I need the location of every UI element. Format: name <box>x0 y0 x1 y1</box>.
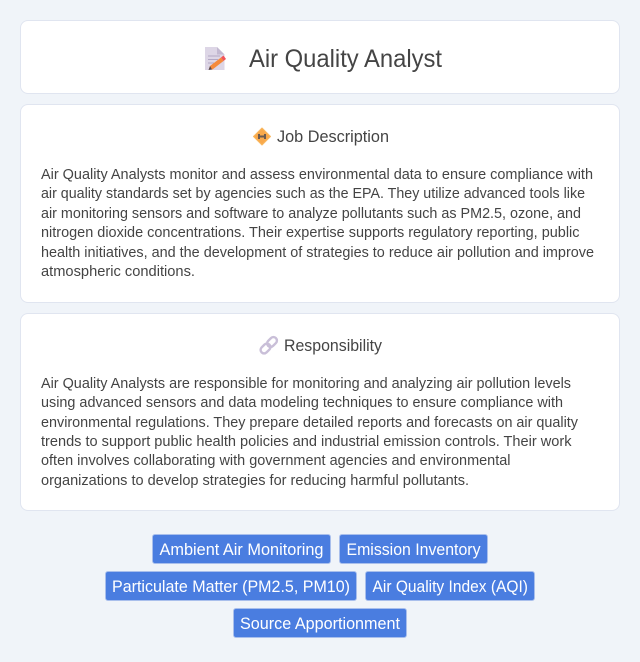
tag: emission inventory: Emission Inventory <box>346 541 481 559</box>
text block: responsibility: trends to support public health policies and industrial emission controls. Their work <box>41 434 572 450</box>
tag: particulate matter: Particulate Matter (PM2.5, PM10) <box>112 578 350 596</box>
text block: responsibility <box>41 376 579 489</box>
text block: job description: health initiatives, and the development of strategies to reduce air pollution and improve <box>41 245 594 261</box>
tag: air quality index <box>365 571 535 601</box>
text block: job description: atmospheric conditions. <box>41 264 195 280</box>
tag: emission inventory <box>339 534 488 564</box>
text block: job description: nitrogen dioxide concentrations. Their expertise supports regulatory reporting, public <box>41 225 580 241</box>
text block: responsibility: using advanced sensors and data modeling techniques to ensure compliance with <box>41 395 563 411</box>
tag: source apportionment <box>233 608 407 638</box>
tag: source apportionment: Source Apportionment <box>240 615 400 633</box>
text block: responsibility: Air Quality Analysts are responsible for monitoring and analyzing air pollution levels <box>41 376 571 392</box>
tag: ambient air monitoring: Ambient Air Monitoring <box>160 541 324 559</box>
tag: ambient air monitoring <box>152 534 331 564</box>
panel: responsibility <box>20 313 620 511</box>
heading: responsibility: Responsibility <box>284 337 383 355</box>
text block: job description <box>41 167 594 280</box>
heading: job description: Job Description <box>277 128 389 146</box>
icon: link <box>259 336 278 355</box>
panel: job description <box>20 104 620 303</box>
icon: puzzle diamond <box>254 128 270 145</box>
text block: responsibility: organizations to develop strategies for reducing harmful pollutants. <box>41 473 469 489</box>
text block: responsibility: often involves collaborating with government agencies and environmental <box>41 453 510 469</box>
tag: particulate matter <box>105 571 357 601</box>
tag: air quality index: Air Quality Index (AQI) <box>372 578 528 596</box>
icon: memo with pencil <box>205 47 226 70</box>
text block: job description: air monitoring sensors and software to analyze pollutants such as PM2.5, ozone, and <box>41 206 581 222</box>
text block: responsibility: environmental regulations. They prepare detailed reports and forecasts on air quality <box>41 415 579 431</box>
title: Air Quality Analyst <box>249 46 442 73</box>
text block: job description: Air Quality Analysts monitor and assess environmental data to ensure compliance with <box>41 167 593 183</box>
panel: title card <box>20 20 620 94</box>
text block: job description: air quality standards set by agencies such as the EPA. They utilize advanced tools like <box>41 186 585 202</box>
